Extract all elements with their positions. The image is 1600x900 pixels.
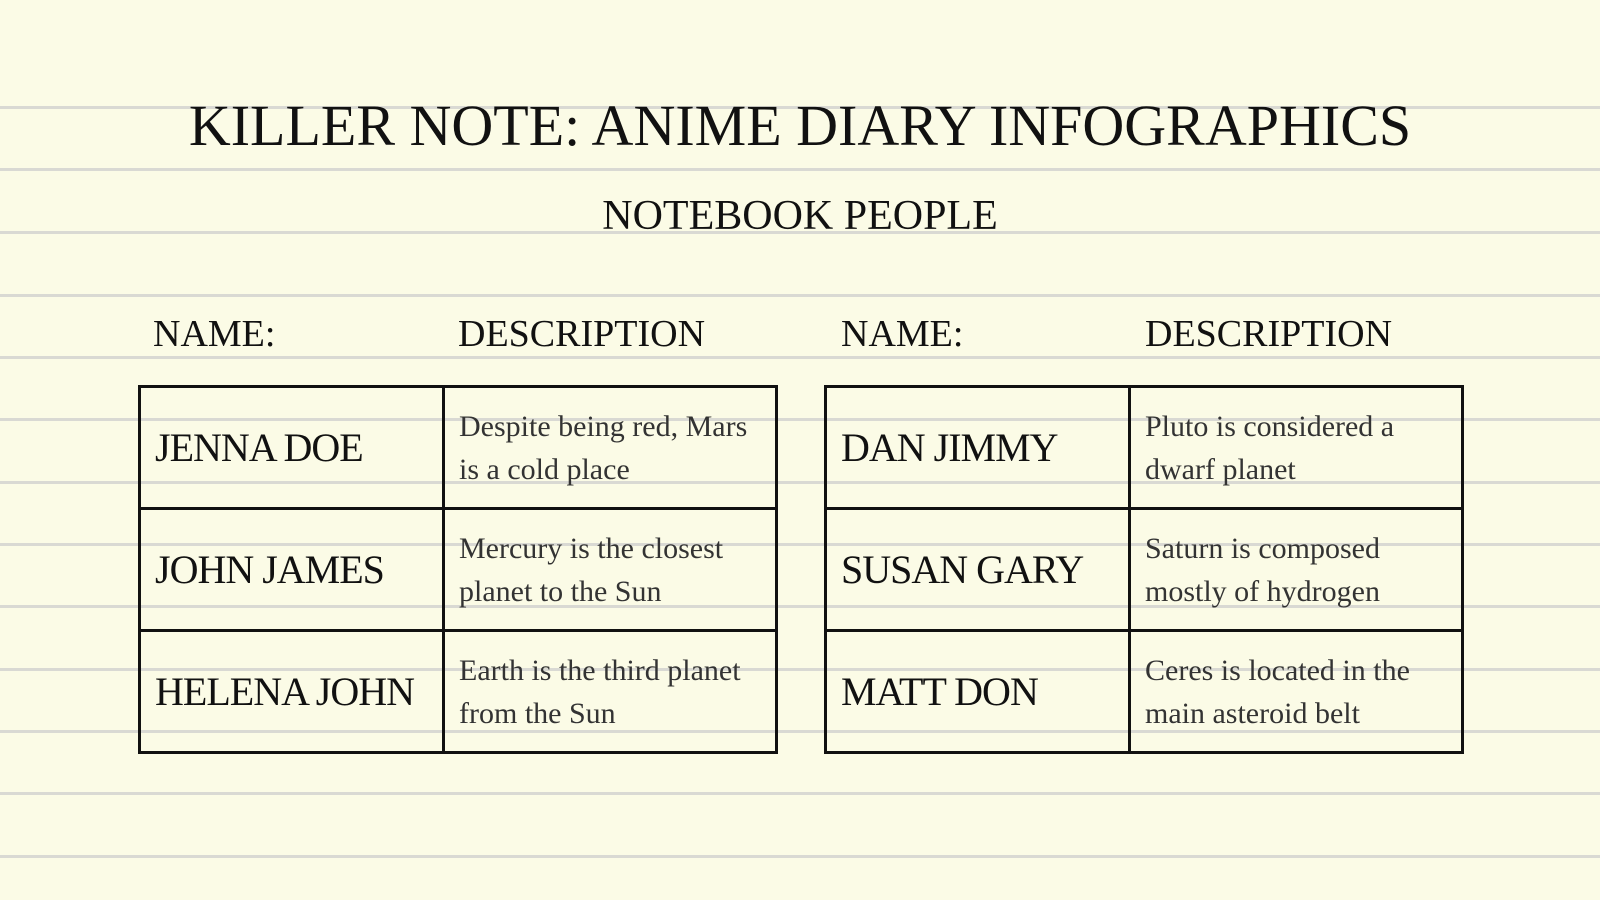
table: right: Pluto is considered a dwarf planet [1145,410,1394,486]
table: left [138,385,778,754]
subtitle: NOTEBOOK PEOPLE [602,193,998,239]
table: left: HELENA JOHN [155,669,414,714]
table: right: MATT DON [841,669,1038,714]
table: left: JENNA DOE [155,425,363,470]
table: left: Despite being red, Mars is a cold place [459,410,747,486]
header: right name: NAME: [841,313,963,355]
table: right: DAN JIMMY [841,425,1058,470]
table: left: Mercury is the closest planet to the Sun [459,532,723,608]
table: right: Saturn is composed mostly of hydrogen [1145,532,1380,608]
table: right: Ceres is located in the main asteroid belt [1145,654,1410,730]
table: left: Earth is the third planet from the Sun [459,654,741,730]
header: left name: NAME: [153,313,275,355]
table: right: SUSAN GARY [841,547,1083,592]
header: right description: DESCRIPTION [1145,313,1392,355]
table: left: JOHN JAMES [155,547,384,592]
table: right [824,385,1464,754]
header: left description: DESCRIPTION [458,313,705,355]
title: KILLER NOTE: ANIME DIARY INFOGRAPHICS [189,93,1411,158]
